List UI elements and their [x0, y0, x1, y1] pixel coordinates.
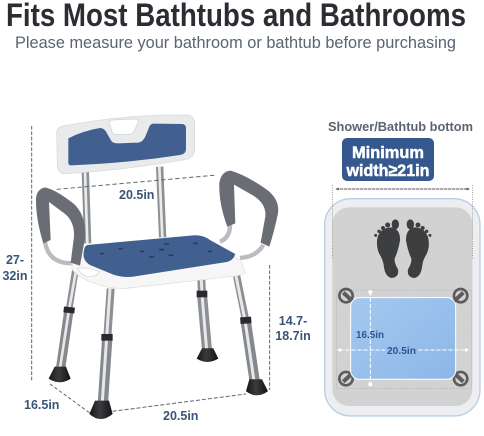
backrest posts: [85, 167, 163, 243]
left arm rail: [45, 242, 72, 263]
minimum width badge: width≥21in: [346, 161, 430, 180]
vertical white dimension line: [368, 290, 372, 386]
backrest handle hole: [109, 119, 138, 134]
arm width dashed line: [57, 175, 217, 189]
seat height dashed line: [268, 265, 271, 390]
label: seat height: 14.7-: [279, 314, 307, 328]
depth dashed line: [50, 384, 89, 413]
right arm rail: [220, 223, 263, 258]
back legs: [49, 271, 218, 382]
icon: right footprint: [406, 219, 431, 278]
minimum width badge: [342, 138, 434, 181]
foot width dashed line: [113, 394, 246, 411]
icon: left footprint: [374, 219, 400, 278]
minimum width arrow: [335, 188, 470, 190]
seat base: [72, 257, 245, 289]
height dashed line: [30, 126, 33, 382]
chair feet: [339, 289, 467, 385]
front legs: [89, 276, 268, 419]
backrest pad: [68, 124, 186, 165]
shower bottom heading: Shower/Bathtub bottom: [328, 120, 473, 134]
label: foot width: 20.5in: [163, 409, 198, 423]
subtitle: Please measure your bathroom or bathtub before purchasing: [15, 33, 456, 52]
bathtub diagram: [325, 185, 480, 416]
seat footprint: [351, 298, 456, 379]
chair illustration: [32, 115, 278, 419]
backrest: [57, 115, 195, 174]
label: depth: 16.5in: [24, 398, 59, 412]
label: overall height: 27-: [6, 253, 24, 267]
seat pad: [83, 235, 235, 277]
seat depth label: 16.5in: [356, 330, 384, 341]
right armrest pad: [219, 171, 278, 247]
tub floor: [332, 207, 472, 406]
seat width label: 20.5in: [387, 346, 416, 357]
horizontal white dimension line: [337, 348, 469, 352]
chair footprint outline: [337, 290, 471, 389]
minimum width dotted guides: [333, 185, 473, 258]
minimum width badge: Minimum: [352, 143, 424, 162]
left armrest pad: [36, 187, 85, 266]
tub outer shell: [325, 199, 480, 416]
label: arm width: 20.5in: [119, 188, 154, 202]
label: overall height: 32in: [2, 269, 28, 283]
seat grab handle: [77, 268, 99, 277]
label: seat height: 18.7in: [275, 329, 311, 343]
